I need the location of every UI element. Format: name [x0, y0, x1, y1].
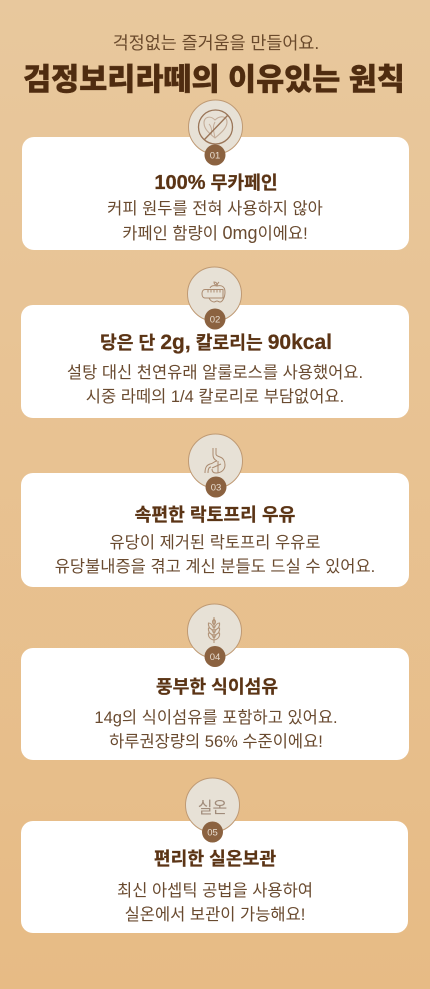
- panel: card 2 sugar and calories: [21, 305, 409, 418]
- heading 5: 편리한 실온보관: [154, 849, 276, 869]
- heading 4: 풍부한 식이섬유: [156, 677, 278, 697]
- body 3: 유당불내증을 겪고 계신 분들도 드실 수 있어요.: [55, 558, 375, 576]
- panel: card 3 lactose free: [21, 473, 409, 587]
- body 2: [67, 364, 363, 406]
- panel: card 5 room temperature storage: [21, 821, 408, 933]
- icon: stomach with badge 03: 03: [211, 482, 221, 494]
- icon: room temperature label with badge 05: 05: [207, 828, 218, 838]
- body 4: 하루권장량의 56% 수준이에요!: [109, 733, 323, 751]
- body 5: 실온에서 보관이 가능해요!: [125, 906, 305, 924]
- heading 1: 100% 무카페인: [154, 172, 278, 194]
- icon: crossed coffee beans with badge 01: 01: [210, 150, 220, 162]
- panel: card 1 no caffeine: [22, 137, 409, 250]
- icon: room temperature label with badge 05: 실온: [198, 799, 227, 817]
- subtitle: 걱정없는 즐거움을 만들어요.: [113, 33, 319, 53]
- icon: room temperature label with badge 05: [185, 778, 240, 842]
- title: 검정보리라떼의 이유있는 원칙: [23, 63, 405, 97]
- body 1: 커피 원두를 전혀 사용하지 않아: [107, 200, 323, 218]
- icon: wheat with badge 04: [187, 604, 242, 667]
- body 1: 카페인 함량이 0mg이에요!: [122, 223, 308, 243]
- heading 3: 속편한 락토프리 우유: [135, 505, 295, 525]
- icon: wheat with badge 04: 04: [210, 652, 220, 663]
- icon: crossed coffee beans with badge 01: [188, 100, 243, 166]
- icon: apple with tape measure with badge 02: [187, 266, 242, 330]
- icon: stomach with badge 03: [188, 434, 243, 498]
- icon: apple with tape measure with badge 02: 02: [210, 314, 220, 326]
- body 1: [107, 200, 323, 243]
- body 4: [94, 709, 338, 751]
- body 4: 14g의 식이섬유를 포함하고 있어요.: [94, 709, 338, 727]
- body 3: 유당이 제거된 락토프리 우유로: [109, 534, 321, 552]
- body 5: 최신 아셉틱 공법을 사용하여: [117, 882, 313, 900]
- panel: card 4 dietary fiber: [21, 648, 409, 760]
- body 3: [55, 534, 375, 576]
- body 2: 시중 라떼의 1/4 칼로리로 부담없어요.: [86, 388, 344, 406]
- heading 2: 당은 단 2g, 칼로리는 90kcal: [100, 331, 332, 354]
- body 2: 설탕 대신 천연유래 알룰로스를 사용했어요.: [67, 364, 363, 382]
- body 5: [117, 882, 313, 924]
